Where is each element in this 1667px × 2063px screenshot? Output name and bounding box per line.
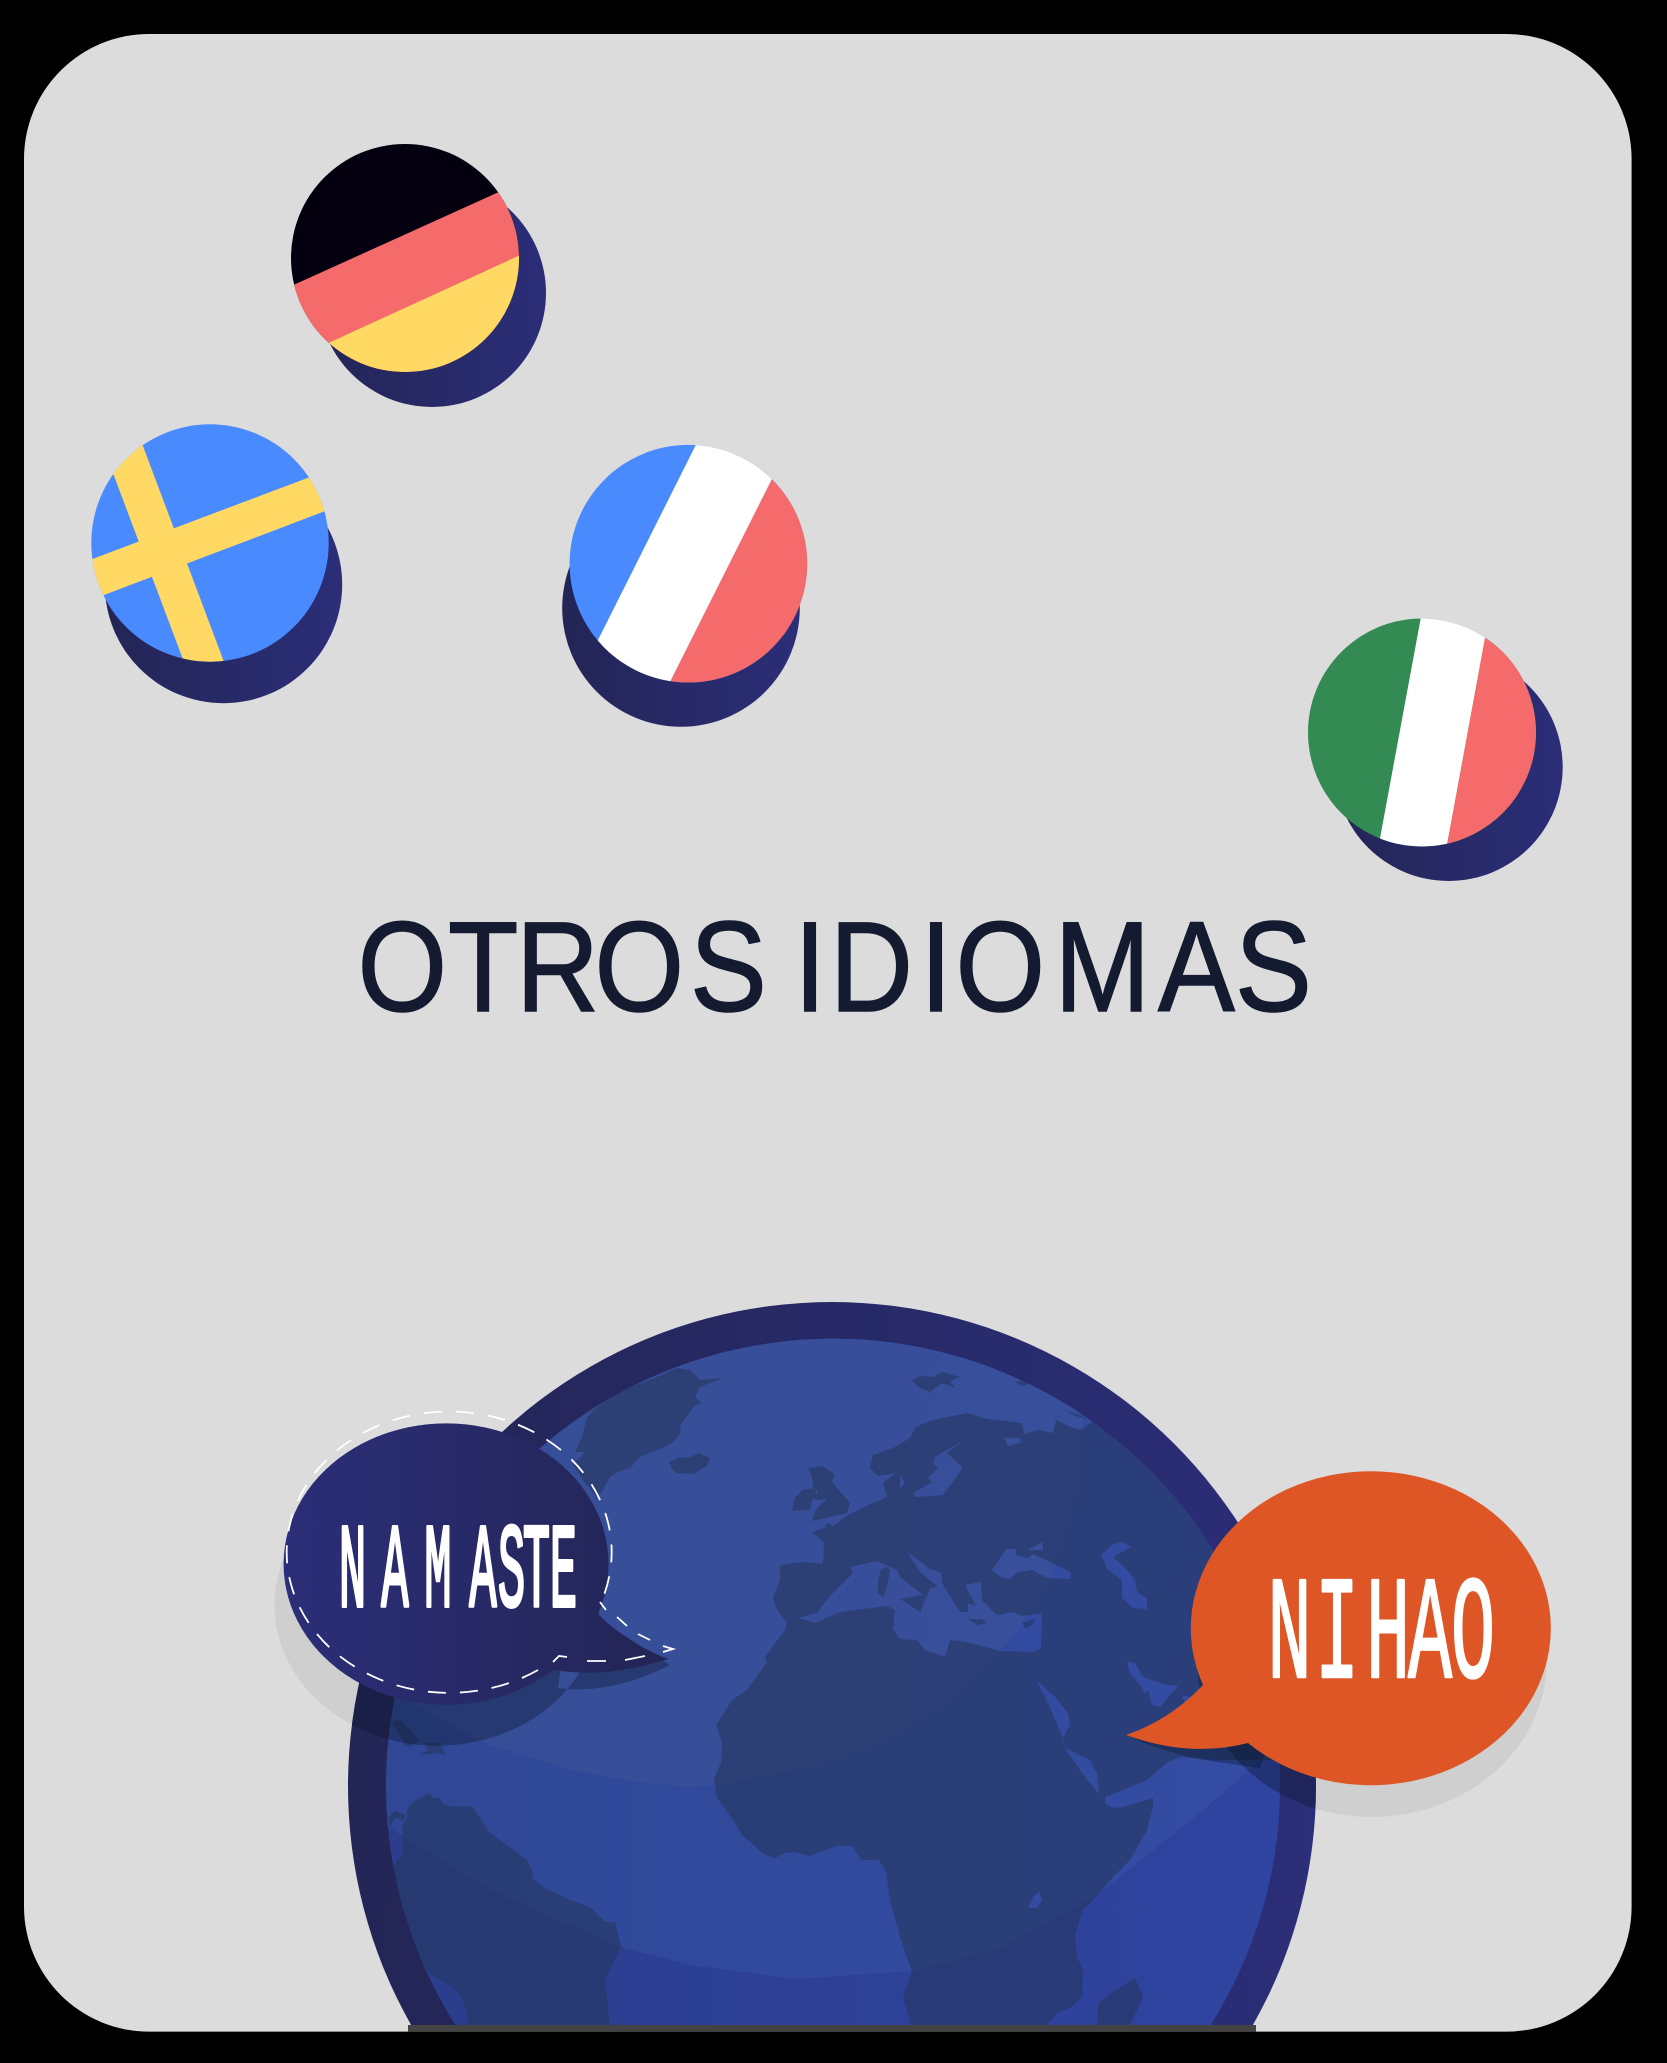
globe	[340, 1302, 1316, 2030]
globe bottom strip	[408, 2025, 1256, 2032]
speech bubble shadows on globe	[352, 1610, 1316, 1808]
dashed stitching	[287, 1411, 673, 1693]
globe ring	[348, 1302, 1316, 2025]
speech bubble shadows on background	[274, 1464, 1547, 1817]
speech bubble: Namaste	[284, 1411, 673, 1705]
continents	[388, 1368, 1290, 2030]
flag: Sweden	[80, 420, 342, 703]
flag: Germany	[280, 130, 546, 407]
label: Namaste: NAMASTE	[339, 1507, 577, 1643]
label: Ni Hao: NI HAO	[1268, 1554, 1495, 1721]
flag: Italy	[1300, 610, 1563, 881]
speech bubble: Ni Hao	[1126, 1471, 1551, 1785]
title: OTROS IDIOMAS	[357, 895, 1312, 1038]
flag: France	[560, 435, 820, 727]
globe ocean and land	[340, 1330, 1290, 2030]
